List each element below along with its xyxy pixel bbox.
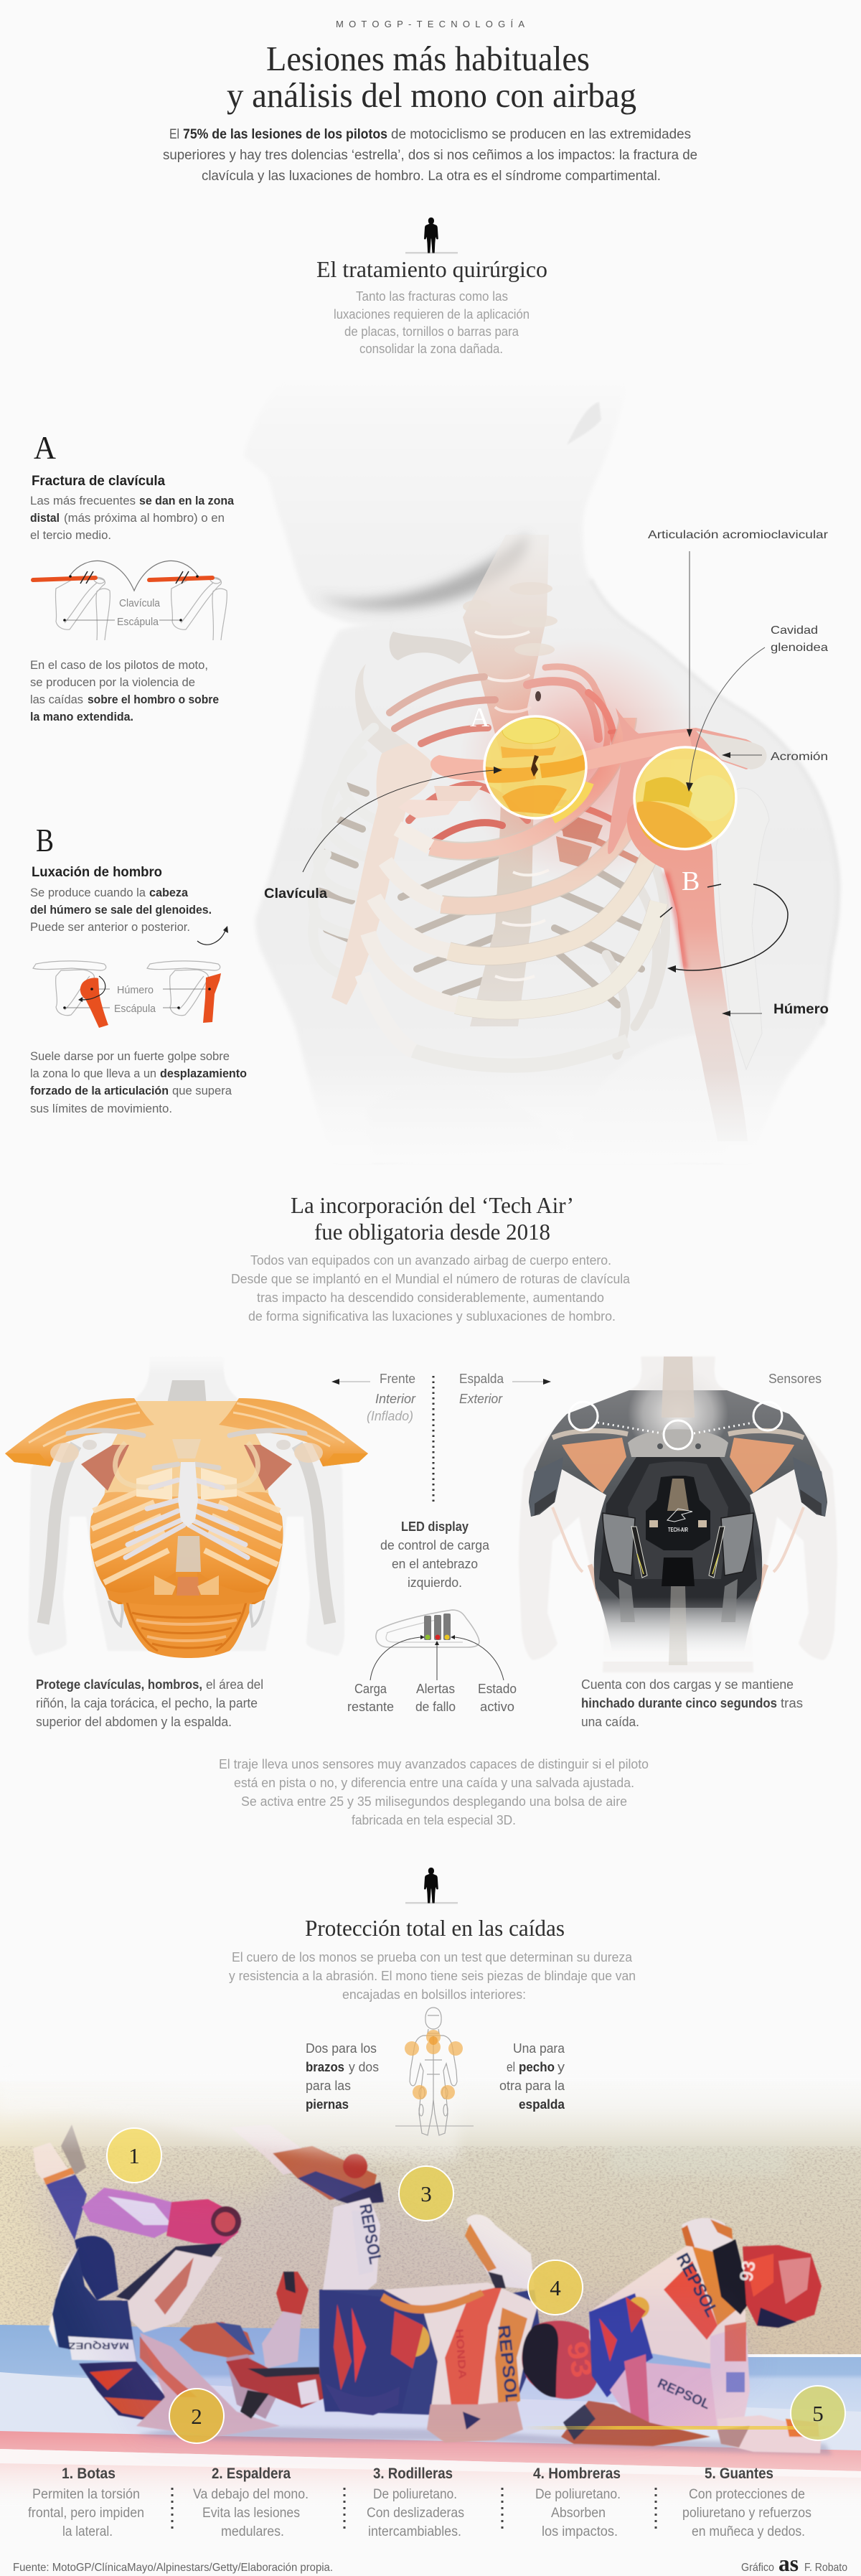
description: Tech Air: de forma significativa las luxaciones y subluxaciones de hombro.	[248, 1309, 616, 1324]
rider 1: MARQUEZ	[68, 2341, 129, 2351]
diagram: clavicle fracture	[55, 561, 227, 640]
rider 2: REPSOL	[355, 2202, 385, 2266]
purple veil on riders	[29, 2153, 761, 2440]
heading: Protección total: Protección total en las caídas	[305, 1915, 565, 1941]
text: pecho y espalda: y	[557, 2060, 565, 2074]
gear column 3: rodilleras: 3. Rodilleras	[373, 2465, 453, 2482]
circle B: shoulder joint	[634, 747, 736, 849]
description: protección: El cuero de los monos se prueba con un test que determinan su dureza	[232, 1950, 633, 1964]
gear column 3: rodilleras: intercambiables.	[368, 2524, 461, 2539]
intro text: superiores y hay tres dolencias ‘estrella’, dos si nos ceñimos a los impactos: la fractura de	[163, 148, 697, 163]
track red kerb	[0, 2431, 861, 2471]
text: brazos y piernas	[306, 2041, 379, 2112]
labels: LED indicators: Alertas	[416, 1682, 455, 1696]
pale rib hoops	[116, 1443, 258, 1487]
text: A cause: la mano extendida.	[30, 710, 133, 723]
heading: Tech Air	[291, 1192, 574, 1245]
heading: Tech Air: La incorporación del ‘Tech Air’	[291, 1192, 574, 1218]
labels: LED indicators: Carga	[354, 1682, 387, 1696]
rider 2: REPSOL	[494, 2324, 522, 2406]
gear column 2: espaldera: Va debajo del mono.	[193, 2487, 309, 2502]
rider 3: REPSOL	[672, 2250, 722, 2320]
gear column 4: hombreras: De poliuretano.	[535, 2487, 621, 2502]
text: pecho y espalda: Una para	[513, 2041, 565, 2056]
description: tratamiento: de placas, tornillos o barras para	[344, 324, 519, 339]
bottom fade	[0, 2491, 861, 2519]
gear column 3: rodilleras: De poliuretano.	[373, 2487, 457, 2502]
circle A: fracture zone	[484, 716, 588, 818]
labels: húmero, escápula: Húmero	[117, 984, 154, 996]
icon: standing figure 2	[405, 1868, 458, 1903]
labels: LED indicators: restante	[347, 1700, 394, 1714]
labels: frente and espalda: (Inflado)	[367, 1409, 413, 1423]
rider 2: 93	[560, 2339, 598, 2380]
text: brazos y piernas: Dos para los	[306, 2041, 377, 2056]
text: B cause	[30, 1049, 247, 1115]
sensors	[569, 1402, 782, 1449]
gear column 5: guantes: poliuretano y refuerzos	[682, 2506, 811, 2521]
gear column 4: hombreras: Absorben	[551, 2506, 606, 2521]
yellow light stripe	[524, 2426, 839, 2430]
front ribs	[413, 718, 659, 1066]
source: Fuente: MotoGP/ClínicaMayo/Alpinestars/Getty/Elaboración propia.	[13, 2562, 333, 2574]
text: LED display: izquierdo.	[408, 1575, 462, 1590]
gear column 4: hombreras: los impactos.	[542, 2524, 618, 2539]
labels: frente and espalda	[331, 1372, 551, 1503]
ear hint	[567, 402, 601, 445]
letter A heading: A	[34, 429, 56, 466]
gear column 3: rodilleras: Con deslizaderas	[367, 2506, 464, 2521]
pale cream chest windows	[136, 1468, 172, 1500]
subheading: Luxación de hombro	[32, 865, 162, 880]
gear column 1: botas: 1. Botas	[62, 2465, 116, 2482]
text: B intro: Puede ser anterior o posterior.	[30, 920, 190, 934]
intro text: El	[169, 127, 179, 142]
red glow	[459, 639, 703, 883]
icon: LED display device	[370, 1610, 504, 1680]
logo text: TECH-AIR	[668, 1527, 688, 1533]
neck light	[628, 1367, 728, 1461]
rider 2	[230, 2125, 601, 2442]
text: dos cargas: tras	[781, 1696, 803, 1710]
labels: frente and espalda: Espalda	[459, 1372, 504, 1386]
markers 1-5: 2	[191, 2404, 202, 2429]
fade	[593, 1597, 765, 1662]
chest pale airbag	[104, 1401, 269, 1497]
text: brazos y piernas: para las	[306, 2079, 351, 2093]
photo: rider crash sequence	[0, 2067, 861, 2519]
heading: El tratamiento quirúrgico: El tratamiento quirúrgico	[316, 256, 547, 282]
rider 2: HONDA	[453, 2328, 469, 2379]
inflated torso	[90, 1492, 283, 1604]
labels: húmero, escápula: Escápula	[114, 1003, 156, 1015]
anatomy labels and leader arrows: Clavícula	[264, 886, 327, 901]
letter A: A	[470, 703, 490, 733]
text: A cause: sobre el hombro o sobre	[88, 693, 219, 706]
text: sensores description: El traje lleva unos sensores muy avanzados capaces de distinguir si el piloto	[219, 1757, 649, 1771]
text: B intro: del húmero se sale del glenoides.	[30, 903, 212, 917]
panel A: fractura de clavícula	[30, 429, 235, 723]
spine	[463, 535, 549, 1026]
intro text: clavícula y las luxaciones de hombro. La otra es el síndrome compartimental.	[202, 169, 661, 184]
labels: clavícula, escápula: Escápula	[117, 616, 159, 628]
credit: Gráfico	[741, 2562, 774, 2574]
labels: LED indicators: Estado	[478, 1682, 517, 1696]
text: B cause: forzado de la articulación	[30, 1084, 169, 1097]
labels: LED indicators	[347, 1682, 517, 1714]
scapula muscles	[81, 1445, 129, 1491]
text: A cause	[30, 658, 219, 723]
text: B intro	[30, 886, 212, 934]
labels: LED indicators: de fallo	[415, 1700, 456, 1714]
text: protege: superior del abdomen y la espalda.	[36, 1715, 232, 1729]
text: dos cargas: una caída.	[581, 1715, 639, 1729]
humerus bones	[43, 1445, 76, 1624]
text: LED display	[380, 1519, 490, 1590]
gear column 5: guantes	[682, 2465, 811, 2539]
humerus	[627, 798, 748, 1141]
white outer ribs left	[313, 728, 380, 973]
anatomy labels and leader arrows: Acromión	[771, 751, 828, 763]
intro text: de motociclismo se producen en las extremidades	[391, 127, 691, 142]
description: Tech Air	[231, 1253, 631, 1324]
airbag cape	[5, 1398, 154, 1466]
text: B cause: sus límites de movimiento.	[30, 1102, 172, 1115]
label: sensores: Sensores	[768, 1372, 822, 1386]
description: protección: y resistencia a la abrasión. El mono tiene seis piezas de blindaje que van	[229, 1969, 636, 1983]
transverse processes	[463, 582, 557, 656]
text: A intro: distal	[30, 511, 60, 525]
description: tratamiento: luxaciones requieren de la aplicación	[334, 307, 530, 322]
abdomen airbag	[120, 1595, 253, 1658]
clavicle	[430, 732, 692, 780]
intro text: 75% de las lesiones de los pilotos	[183, 127, 387, 142]
shell	[529, 1390, 827, 1651]
body silhouette	[29, 1357, 344, 1656]
section label: MOTOGP-TECNOLOGÍA	[336, 19, 524, 29]
text: A intro: se dan en la zona	[139, 494, 235, 507]
credit: F. Robato	[804, 2562, 847, 2574]
front rib outlines	[430, 718, 659, 1010]
back ribs	[316, 782, 641, 1005]
labels: frente and espalda: Frente	[380, 1372, 415, 1386]
text: pecho y espalda	[499, 2041, 565, 2112]
text: A intro: (más próxima al hombro) o en	[64, 511, 225, 525]
text: dos cargas: hinchado durante cinco segundos	[581, 1696, 777, 1710]
labels: LED indicators: activo	[480, 1700, 514, 1714]
text: B cause: que supera	[172, 1084, 232, 1097]
side panels	[603, 1513, 635, 1575]
gear column 1: botas	[28, 2465, 144, 2539]
top fade	[0, 2067, 861, 2153]
right side outer ribs	[606, 851, 666, 1055]
illustration: anatomy torso	[230, 362, 861, 1163]
body silhouette	[519, 1357, 837, 1672]
anatomy labels and leader arrows: glenoidea	[771, 642, 828, 654]
gear column 4: hombreras: 4. Hombreras	[533, 2465, 621, 2482]
rib ends	[109, 1601, 264, 1626]
red upper ribs	[390, 667, 657, 868]
lower body overlap	[567, 1034, 732, 1163]
heading: Tech Air: fue obligatoria desde 2018	[314, 1219, 550, 1245]
icon: rider armour diagram	[395, 2008, 474, 2135]
neck vertebrae back and upper ribs	[390, 632, 474, 664]
text: brazos y piernas: y dos	[349, 2060, 379, 2074]
title: y análisis del mono con airbag	[227, 75, 636, 115]
description: protección	[229, 1950, 636, 2002]
sternum and ribs	[126, 1464, 248, 1558]
wings lower	[530, 1457, 563, 1517]
labels: frente and espalda: Interior	[375, 1392, 416, 1406]
text: B cause: Suele darse por un fuerte golpe sobre	[30, 1049, 230, 1063]
text: sensores description: está en pista o no, y diferencia entre una caída y una salvada ajustada.	[234, 1776, 634, 1790]
central pack	[599, 1457, 757, 1608]
markers 1-5: 1	[128, 2143, 140, 2168]
intro text	[163, 127, 697, 184]
text: sensores description	[219, 1757, 649, 1827]
fade bottom	[230, 1069, 861, 1163]
rider 3: 93	[735, 2259, 760, 2283]
text: protege	[36, 1677, 263, 1729]
far arm bone	[716, 788, 769, 1069]
gear column 1: botas: frontal, pero impiden	[28, 2506, 144, 2521]
markers 1-5	[107, 2128, 845, 2443]
rib cartilage	[362, 828, 456, 1051]
labels: clavícula, escápula	[117, 597, 161, 628]
credit	[741, 2550, 847, 2576]
text: LED display: de control de carga	[380, 1538, 490, 1552]
diagram: dislocation	[33, 961, 220, 1016]
anatomy labels and leader arrows	[264, 529, 829, 1017]
track blue	[0, 2325, 861, 2455]
letter B heading: B	[36, 822, 54, 858]
text: B intro: cabeza	[149, 886, 189, 899]
text: dos cargas: Cuenta con dos cargas y se mantiene	[581, 1677, 794, 1692]
gear column 3: rodilleras	[367, 2465, 464, 2539]
text: A cause: En el caso de los pilotos de moto,	[30, 658, 208, 672]
text: B cause: desplazamiento	[160, 1067, 247, 1080]
text: LED display: LED display	[401, 1519, 469, 1534]
gear column 1: botas: Permiten la torsión	[32, 2487, 140, 2502]
labels: frente and espalda: Exterior	[459, 1392, 503, 1406]
rider 1	[33, 2125, 326, 2437]
gear column 5: guantes: en muñeca y dedos.	[692, 2524, 805, 2539]
text: protege: el área del	[206, 1677, 263, 1692]
illustration: airbag interior, front	[5, 1349, 368, 1658]
text: protege: riñón, la caja torácica, el pecho, la parte	[36, 1696, 258, 1710]
subheading: Fractura de clavícula	[32, 474, 165, 489]
text: sensores description: Se activa entre 25 y 35 milisegundos desplegando una bolsa de aire	[241, 1794, 627, 1809]
labels: clavícula, escápula: Clavícula	[119, 597, 161, 609]
arrow: rotation	[197, 926, 228, 945]
text: A intro	[30, 494, 235, 542]
text: A cause: se producen por la violencia de	[30, 675, 195, 689]
text: brazos y piernas: piernas	[306, 2097, 349, 2112]
anatomy labels and leader arrows: Cavidad	[771, 624, 818, 637]
text: protege: Protege clavículas, hombros,	[36, 1677, 202, 1692]
gear column 4: hombreras	[533, 2465, 621, 2539]
gravel background	[0, 2081, 861, 2354]
gear column 2: espaldera: medulares.	[221, 2524, 284, 2539]
text: A intro: el tercio medio.	[30, 528, 111, 542]
illustration: airbag exterior, back	[519, 1357, 837, 1672]
body edge shading	[591, 579, 838, 1026]
text: B cause: la zona lo que lleva a un	[30, 1067, 156, 1080]
text: sensores description: fabricada en tela especial 3D.	[352, 1813, 516, 1827]
text: B intro: Se produce cuando la	[30, 886, 146, 899]
scapula muscles	[562, 1438, 626, 1493]
chest translucent	[628, 1429, 728, 1457]
gear column 2: espaldera	[193, 2465, 309, 2539]
clavicle and shoulder bones	[68, 1430, 305, 1435]
scapula spike and acromion	[608, 708, 759, 854]
credit: as	[778, 2550, 799, 2576]
labels: húmero, escápula	[114, 984, 156, 1015]
text: dos cargas	[581, 1677, 803, 1729]
markers 1-5: 4	[550, 2275, 561, 2300]
description: tratamiento	[334, 289, 530, 356]
gear column 2: espaldera: 2. Espaldera	[212, 2465, 291, 2482]
rider 3: REPSOL	[655, 2376, 712, 2412]
body silhouette	[244, 362, 838, 1163]
neck spine	[166, 1380, 207, 1435]
description: Tech Air: Desde que se implantó en el Mundial el número de roturas de clavícula	[231, 1272, 631, 1286]
panel B: luxación de hombro	[30, 822, 247, 1115]
icon: standing figure	[405, 217, 458, 254]
gear column 5: guantes: 5. Guantes	[705, 2465, 773, 2482]
chin shadow	[316, 535, 528, 609]
markers 1-5: 5	[812, 2401, 824, 2426]
text: pecho y espalda: pecho	[519, 2060, 555, 2074]
gear column 5: guantes: Con protecciones de	[689, 2487, 805, 2502]
text: LED display: en el antebrazo	[392, 1557, 478, 1571]
rider 3	[561, 2218, 822, 2453]
description: Tech Air: tras impacto ha descendido considerablemente, aumentando	[257, 1291, 604, 1305]
anatomy labels and leader arrows: Húmero	[773, 1002, 829, 1017]
text: pecho y espalda: espalda	[519, 2097, 565, 2112]
anatomy labels and leader arrows: Articulación acromioclavicular	[648, 529, 829, 541]
letter B: B	[682, 866, 700, 896]
description: tratamiento: consolidar la zona dañada.	[359, 342, 503, 356]
text: A intro: Las más frecuentes	[30, 494, 136, 507]
gear column 1: botas: la lateral.	[62, 2524, 113, 2539]
text: pecho y espalda: otra para la	[499, 2079, 565, 2093]
sternum	[331, 744, 433, 1005]
text: brazos y piernas: brazos	[306, 2060, 344, 2074]
description: protección: encajadas en bolsillos interiores:	[342, 1987, 526, 2002]
title: Lesiones más habituales	[266, 39, 590, 78]
text: A cause: las caídas	[30, 693, 83, 706]
markers 1-5: 3	[420, 2181, 432, 2206]
gear column 2: espaldera: Evita las lesiones	[202, 2506, 300, 2521]
description: Tech Air: Todos van equipados con un avanzado airbag de cuerpo entero.	[250, 1253, 611, 1268]
text: pecho y espalda: el	[507, 2060, 515, 2074]
description: tratamiento: Tanto las fracturas como las	[356, 289, 508, 304]
title	[227, 39, 636, 115]
